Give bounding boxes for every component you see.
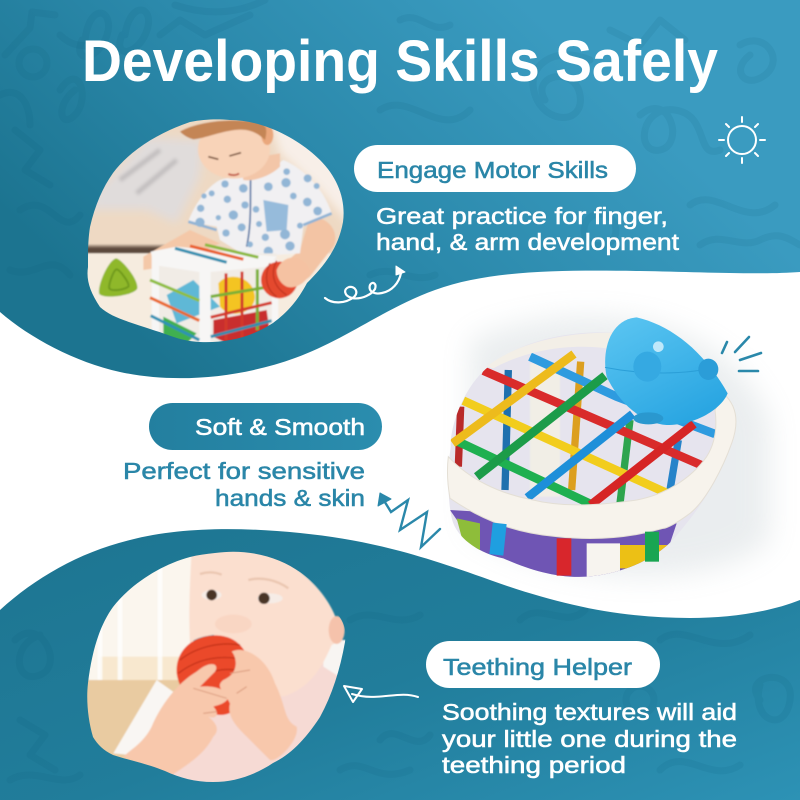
text block: soft description [123, 458, 365, 511]
text block: motor skills description: hand, & arm development [376, 229, 680, 255]
colored elastic straps [453, 354, 715, 505]
white wave band [0, 271, 800, 618]
photo background wall [88, 119, 344, 254]
toy interior [448, 332, 715, 541]
doodle pattern: bottom section [10, 610, 790, 780]
doodle pattern: top section [0, 0, 800, 278]
white sleeve [113, 680, 180, 757]
rim straps [489, 523, 507, 556]
white rim [447, 393, 736, 539]
text block: motor skills description [376, 203, 680, 255]
sparks near blue ball [722, 337, 761, 371]
label pill: Soft & Smooth [149, 403, 382, 450]
baby face [189, 552, 336, 674]
background: bottom teal section [0, 500, 800, 800]
nose [215, 615, 252, 633]
blue half ball [605, 317, 728, 425]
baby arms [143, 230, 220, 270]
label pill: Soft & Smooth: Soft & Smooth [195, 414, 365, 440]
text block: teething description: teething period [442, 752, 626, 778]
baby hands [123, 664, 228, 777]
wooden floor [87, 679, 180, 762]
photo: baby teething on ball [87, 552, 346, 782]
baby shirt [188, 160, 332, 257]
text block: motor skills description: Great practice for finger, [376, 203, 668, 229]
background: top teal section [0, 0, 800, 420]
text block: teething description [442, 699, 737, 778]
eyes [202, 590, 222, 600]
label pill: Teething Helper: Teething Helper [443, 654, 632, 680]
wall to table shadow [80, 246, 167, 255]
text block: soft description: hands & skin [215, 485, 365, 511]
icon: sun [719, 117, 765, 163]
text block: teething description: your little one during the [442, 726, 737, 752]
triangle toy [99, 258, 137, 297]
red ball in hand [261, 262, 298, 298]
inner upright columns and balls [530, 363, 560, 497]
label pill: Teething Helper [426, 641, 660, 688]
soft shadow around toy [470, 316, 770, 576]
photo: toddler playing with cube [88, 119, 344, 342]
arrow: zigzag pointing to text [378, 493, 440, 547]
curtain background [88, 556, 194, 681]
title: Developing Skills Safely [82, 29, 718, 94]
toy cube contents [158, 252, 273, 269]
text block: teething description: Soothing textures will aid [442, 699, 737, 725]
toy cube frame [151, 247, 277, 273]
top of rim [487, 333, 617, 368]
label pill: Engage Motor Skills: Engage Motor Skills [377, 157, 608, 183]
red ball [177, 635, 250, 715]
bib [167, 640, 360, 790]
photo: sorting toy close-up [447, 317, 736, 577]
text block: soft description: Perfect for sensitive [123, 458, 365, 484]
label pill: Engage Motor Skills [354, 145, 636, 192]
arrow: points to baby photo [344, 686, 418, 702]
table surface [88, 252, 331, 330]
arrow: squiggle pointing up to text [325, 266, 405, 302]
baby head [240, 153, 280, 180]
